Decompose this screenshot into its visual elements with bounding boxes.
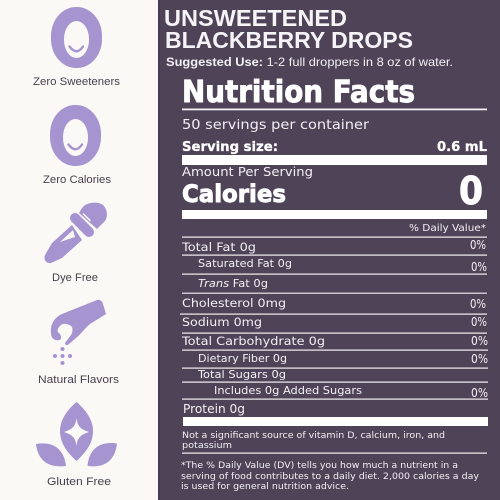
row: dietary fiber <box>198 351 488 366</box>
panel: nutrition background <box>158 0 500 500</box>
icon: dropper <box>44 203 107 263</box>
row: serving size: 0.6 mL <box>437 139 487 155</box>
row: added sugars: Includes 0g Added Sugars <box>214 384 362 397</box>
label: zero sweeteners: Zero Sweeteners <box>33 76 121 88</box>
icon: zero sweeteners <box>51 7 102 68</box>
row: cholesterol: 0% <box>470 296 486 311</box>
row: trans fat: Trans Fat 0g <box>198 277 268 290</box>
text: daily value footnote <box>181 461 479 492</box>
row: saturated fat: 0% <box>471 259 487 274</box>
label: dye free: Dye Free <box>52 272 98 284</box>
heading: product name: BLACKBERRY DROPS <box>165 27 413 53</box>
text: servings per container: 50 servings per container <box>182 118 370 133</box>
row: dietary fiber: Dietary Fiber 0g <box>198 352 287 365</box>
text: daily value footnote: is used for general nutrition advice. <box>181 482 349 492</box>
text: daily value header: % Daily Value* <box>409 223 486 234</box>
panel: nutrition facts label <box>180 75 488 492</box>
row: added sugars: 0% <box>471 385 488 400</box>
heading: product name: UNSWEETENED <box>164 5 347 31</box>
row: serving size <box>182 139 487 155</box>
icon: zero calories <box>50 105 101 166</box>
heading: nutrition facts: Nutrition Facts <box>182 75 415 110</box>
text: amount per serving: Amount Per Serving <box>182 165 313 179</box>
label: natural flavors: Natural Flavors <box>38 374 120 386</box>
row: serving size: Serving size: <box>182 139 278 155</box>
text: not a significant source: Not a significant source of vitamin D, calcium, iron, and <box>182 431 445 441</box>
row: protein: Protein 0g <box>183 401 245 416</box>
row: total sugars: Total Sugars 0g <box>197 368 286 381</box>
row: saturated fat <box>198 257 487 274</box>
panel: benefits column <box>33 7 121 488</box>
text: daily value footnote: serving of food contributes to a daily diet. 2,000 calories a day <box>181 472 479 482</box>
row: cholesterol: Cholesterol 0mg <box>182 296 286 310</box>
label: zero calories: Zero Calories <box>43 174 112 186</box>
label: gluten free: Gluten Free <box>47 476 111 488</box>
text: not a significant source <box>182 431 445 451</box>
row: saturated fat: Saturated Fat 0g <box>198 257 292 270</box>
row: sodium <box>182 314 487 329</box>
row: cholesterol <box>182 296 486 311</box>
row: total carbohydrate <box>181 333 488 348</box>
row: total fat: 0% <box>470 237 486 252</box>
row: calories: Calories <box>182 180 286 208</box>
text: not a significant source: potassium <box>182 441 232 451</box>
row: total fat <box>181 237 486 254</box>
row: added sugars <box>214 384 488 400</box>
row: dietary fiber: 0% <box>471 351 488 366</box>
row: total carbohydrate: 0% <box>471 333 488 348</box>
text: daily value footnote: *The % Daily Value (DV) tells you how much a nutrient in a <box>181 461 458 471</box>
row: calories: 0 <box>459 169 483 213</box>
row: calories <box>182 169 483 213</box>
row: total carbohydrate: Total Carbohydrate 0g <box>181 334 325 348</box>
heading: product name <box>164 5 413 53</box>
icon: gluten free leaves <box>36 402 117 466</box>
text: suggested use: Suggested Use: 1-2 full droppers in 8 oz of water. <box>166 55 453 69</box>
row: sodium: Sodium 0mg <box>182 315 262 329</box>
row: sodium: 0% <box>471 314 487 329</box>
row: total fat: Total Fat 0g <box>181 240 256 254</box>
icon: pinching hand with flakes <box>51 300 106 365</box>
